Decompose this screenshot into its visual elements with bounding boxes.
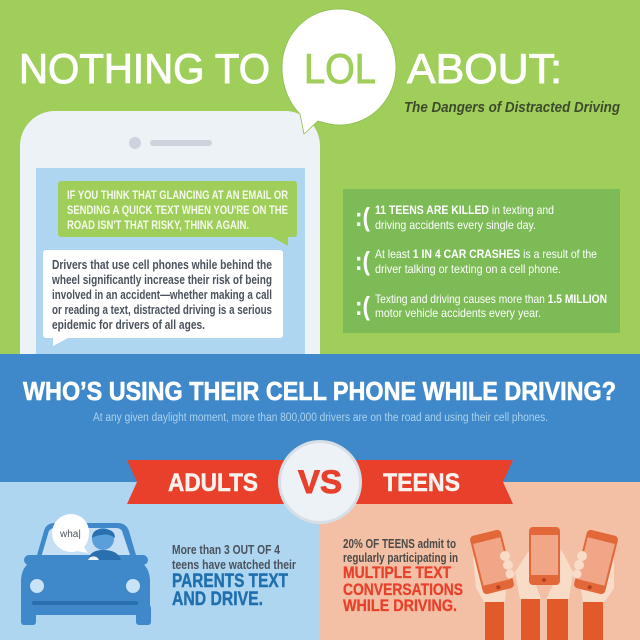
text: teens: MULTIPLE TEXT — [343, 563, 451, 582]
text: teens — [343, 537, 463, 615]
subtitle: The Dangers of Distracted Driving — [404, 99, 620, 116]
white message bubble — [43, 250, 283, 346]
speech bubble: wha: wha| — [59, 529, 81, 540]
text: adults: More than 3 OUT OF 4 — [172, 543, 280, 557]
left hand and sleeve — [473, 557, 512, 640]
title: nothing to: NOTHING TO — [19, 45, 270, 92]
ribbon — [127, 460, 513, 504]
vs badge — [278, 440, 362, 524]
stat: car crashes: At least 1 IN 4 CAR CRASHES is a result of the — [375, 247, 597, 261]
stat: million accidents — [355, 291, 607, 321]
panel: blue section — [0, 354, 640, 482]
stat: car crashes: driver talking or texting on a cell phone. — [375, 262, 561, 276]
stat: teens killed: :( — [355, 202, 370, 232]
text: teens: 20% OF TEENS admit to — [343, 537, 456, 551]
white message bubble: or reading a text, distracted driving is a serious — [52, 303, 272, 317]
stat: million accidents: Texting and driving causes more than 1.5 MILLION — [375, 292, 607, 306]
green message bubble — [58, 181, 297, 246]
sub heading: At any given daylight moment, more than 800,000 drivers are on the road and using their cell phones. — [93, 412, 548, 424]
centre phone — [529, 527, 560, 585]
title: speech bubble with LOL: LOL — [304, 45, 376, 92]
stat: teens killed — [355, 202, 554, 232]
panel: teens — [320, 482, 640, 640]
ribbon: ADULTS — [168, 469, 258, 497]
icon: driver — [88, 528, 121, 560]
stat: million accidents: motor vehicle accidents every year. — [375, 306, 541, 320]
text: teens: CONVERSATIONS — [343, 580, 463, 599]
stat: teens killed: driving accidents every single day. — [375, 218, 536, 232]
fingers — [500, 551, 587, 578]
stat: teens killed: 11 TEENS ARE KILLED in texting and — [375, 203, 554, 217]
title: about: ABOUT: — [407, 45, 562, 92]
green message bubble: ROAD ISN'T THAT RISKY, THINK AGAIN. — [67, 218, 249, 232]
white message bubble: epidemic for drivers of all ages. — [52, 318, 205, 332]
stat: car crashes: :( — [355, 246, 370, 276]
right hand and sleeve — [576, 557, 614, 640]
vs badge: VS — [298, 464, 342, 500]
left phone — [469, 529, 515, 595]
title: speech bubble with LOL — [282, 9, 396, 134]
white message bubble: Drivers that use cell phones while behind the — [52, 258, 272, 272]
ribbon: TEENS — [383, 469, 460, 497]
panel: phone — [20, 111, 320, 354]
stat: car crashes — [355, 246, 597, 276]
right phone — [573, 529, 619, 595]
centre hands and sleeves — [515, 549, 573, 640]
text: adults — [172, 543, 296, 610]
panel: adults — [0, 482, 320, 640]
icon: hands holding phones — [469, 527, 619, 640]
green message bubble: SENDING A QUICK TEXT WHEN YOU'RE ON THE — [67, 203, 288, 217]
stat: million accidents: :( — [355, 291, 370, 321]
white message bubble: wheel significantly increase their risk of being — [51, 273, 272, 287]
text: teens: WHILE DRIVING. — [343, 596, 457, 615]
text: adults: teens have watched their — [172, 558, 296, 572]
text: teens: regularly participating in — [343, 551, 458, 565]
green message bubble: IF YOU THINK THAT GLANCING AT AN EMAIL OR — [67, 188, 288, 202]
text: adults: AND DRIVE. — [172, 589, 263, 610]
icon: car — [21, 514, 151, 625]
white message bubble: involved in an accident—whether making a call — [52, 288, 272, 302]
text: adults: PARENTS TEXT — [172, 571, 288, 592]
panel: statistics — [343, 189, 620, 333]
